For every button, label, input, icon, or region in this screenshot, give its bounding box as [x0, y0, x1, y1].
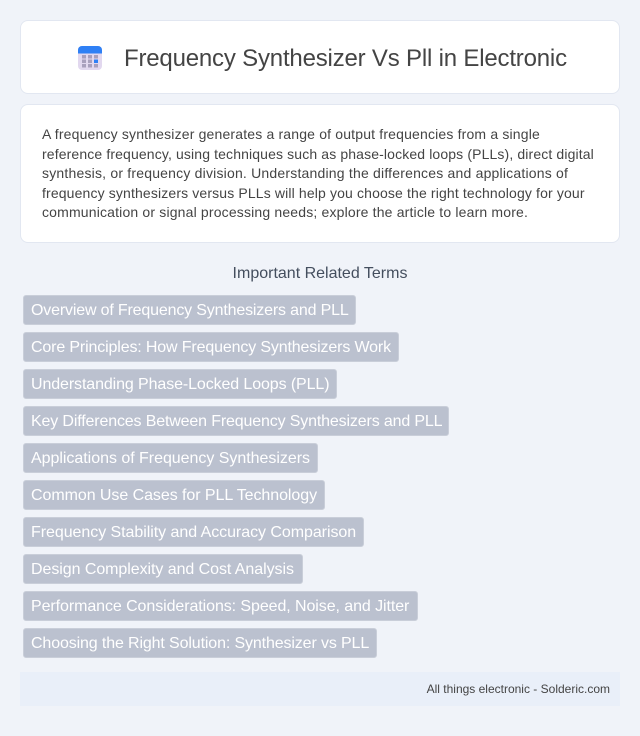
- tag list: Performance Considerations: Speed, Noise, and Jitter: [31, 598, 409, 615]
- intro text: reference frequency, using techniques such as phase-locked loops (PLLs), direct digital: [42, 146, 594, 162]
- icon: calendar grid: [78, 46, 102, 70]
- tag list: Overview of Frequency Synthesizers and PLL: [31, 302, 349, 319]
- tag list: Applications of Frequency Synthesizers: [31, 450, 310, 467]
- intro text: synthesis, or frequency division. Understanding the differences and applications of: [42, 165, 568, 181]
- tag list: Choosing the Right Solution: Synthesizer vs PLL: [31, 635, 369, 652]
- intro text: communication or signal processing needs; explore the article to learn more.: [42, 204, 528, 220]
- tag list: Common Use Cases for PLL Technology: [31, 487, 317, 504]
- tag list: [23, 295, 449, 658]
- footer: [20, 672, 620, 706]
- intro text: A frequency synthesizer generates a range of output frequencies from a single: [42, 126, 540, 142]
- tag list: Core Principles: How Frequency Synthesizers Work: [31, 339, 391, 356]
- footer: All things electronic - Solderic.com: [427, 682, 610, 696]
- tag list: Key Differences Between Frequency Synthesizers and PLL: [31, 413, 442, 430]
- section heading: Important Related Terms: [233, 264, 407, 282]
- header panel: [20, 20, 620, 94]
- title: Frequency Synthesizer Vs Pll in Electronic: [124, 45, 567, 72]
- tag list: Design Complexity and Cost Analysis: [31, 561, 294, 578]
- intro text: [42, 126, 594, 220]
- tag list: Frequency Stability and Accuracy Comparison: [31, 524, 356, 541]
- intro panel: [20, 104, 620, 243]
- tag list: Understanding Phase-Locked Loops (PLL): [31, 376, 329, 393]
- intro text: frequency synthesizers versus PLLs will help you choose the right technology for your: [42, 184, 585, 200]
